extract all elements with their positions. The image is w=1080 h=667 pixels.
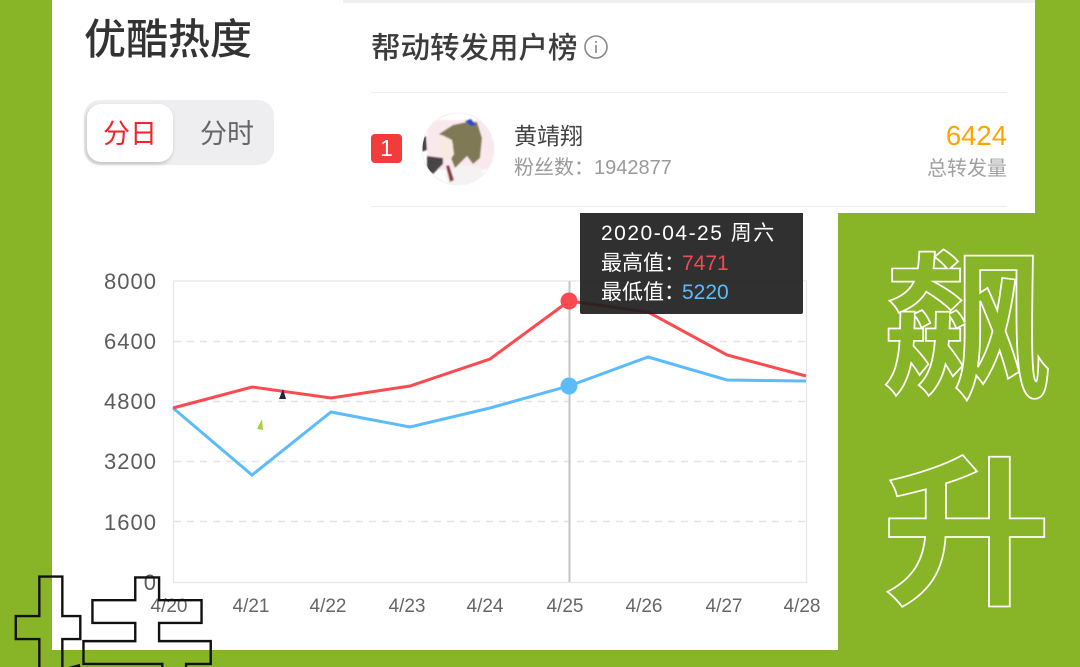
x axis labels: 4/22 <box>310 596 346 617</box>
y axis labels: 4800 <box>104 389 157 414</box>
y axis labels: 6400 <box>104 329 157 354</box>
y axis labels <box>104 269 157 595</box>
marker: highest <box>560 292 578 310</box>
y axis labels: 8000 <box>104 269 157 294</box>
user name: 黄靖翔 <box>514 123 583 149</box>
cursor line <box>568 281 570 582</box>
x axis labels: 4/26 <box>626 596 662 617</box>
forward label: 总转发量 <box>927 158 1007 180</box>
series: highest value <box>173 301 806 408</box>
rank badge: 1 <box>380 135 393 161</box>
follower count: 粉丝数：1942877 <box>514 157 672 179</box>
toggle: day or hour <box>84 100 274 165</box>
icon: info <box>584 35 608 59</box>
stray mark dark <box>279 389 286 399</box>
tab: hour: 分时 <box>200 119 254 149</box>
x axis labels: 4/28 <box>784 596 820 617</box>
rank badge <box>371 134 402 163</box>
x axis labels: 4/25 <box>547 596 583 617</box>
x axis labels: 4/24 <box>467 596 504 617</box>
ranking heading: 帮动转发用户榜 <box>371 32 578 65</box>
marker: lowest <box>560 378 578 394</box>
y axis labels: 3200 <box>104 449 157 474</box>
avatar <box>422 112 494 186</box>
x axis labels: 4/21 <box>233 596 269 617</box>
active tab: day: 分日 <box>103 119 157 149</box>
panel: main white card <box>52 0 838 650</box>
tooltip lowest value: 最低值：5220 <box>601 281 729 304</box>
x axis labels <box>151 596 820 617</box>
tooltip date: 2020-04-25 周六 <box>601 222 776 245</box>
x axis labels: 4/20 <box>151 596 187 617</box>
tooltip <box>580 213 803 314</box>
active tab: day <box>87 104 173 162</box>
x axis labels: 4/23 <box>389 596 425 617</box>
plot frame <box>174 281 806 582</box>
title: 优酷热度 <box>84 16 252 63</box>
divider bottom <box>371 206 1007 207</box>
panel: forwarding users ranking <box>343 0 1035 213</box>
divider top <box>371 92 1007 93</box>
y axis labels: 1600 <box>104 510 157 535</box>
top strip <box>343 0 1035 3</box>
series: lowest value <box>173 357 806 475</box>
stray mark green <box>257 419 263 430</box>
tooltip highest value: 最高值：7471 <box>601 252 729 275</box>
forward count: 6424 <box>946 120 1007 151</box>
x axis labels: 4/27 <box>706 596 742 617</box>
y axis labels: 0 <box>144 570 157 595</box>
